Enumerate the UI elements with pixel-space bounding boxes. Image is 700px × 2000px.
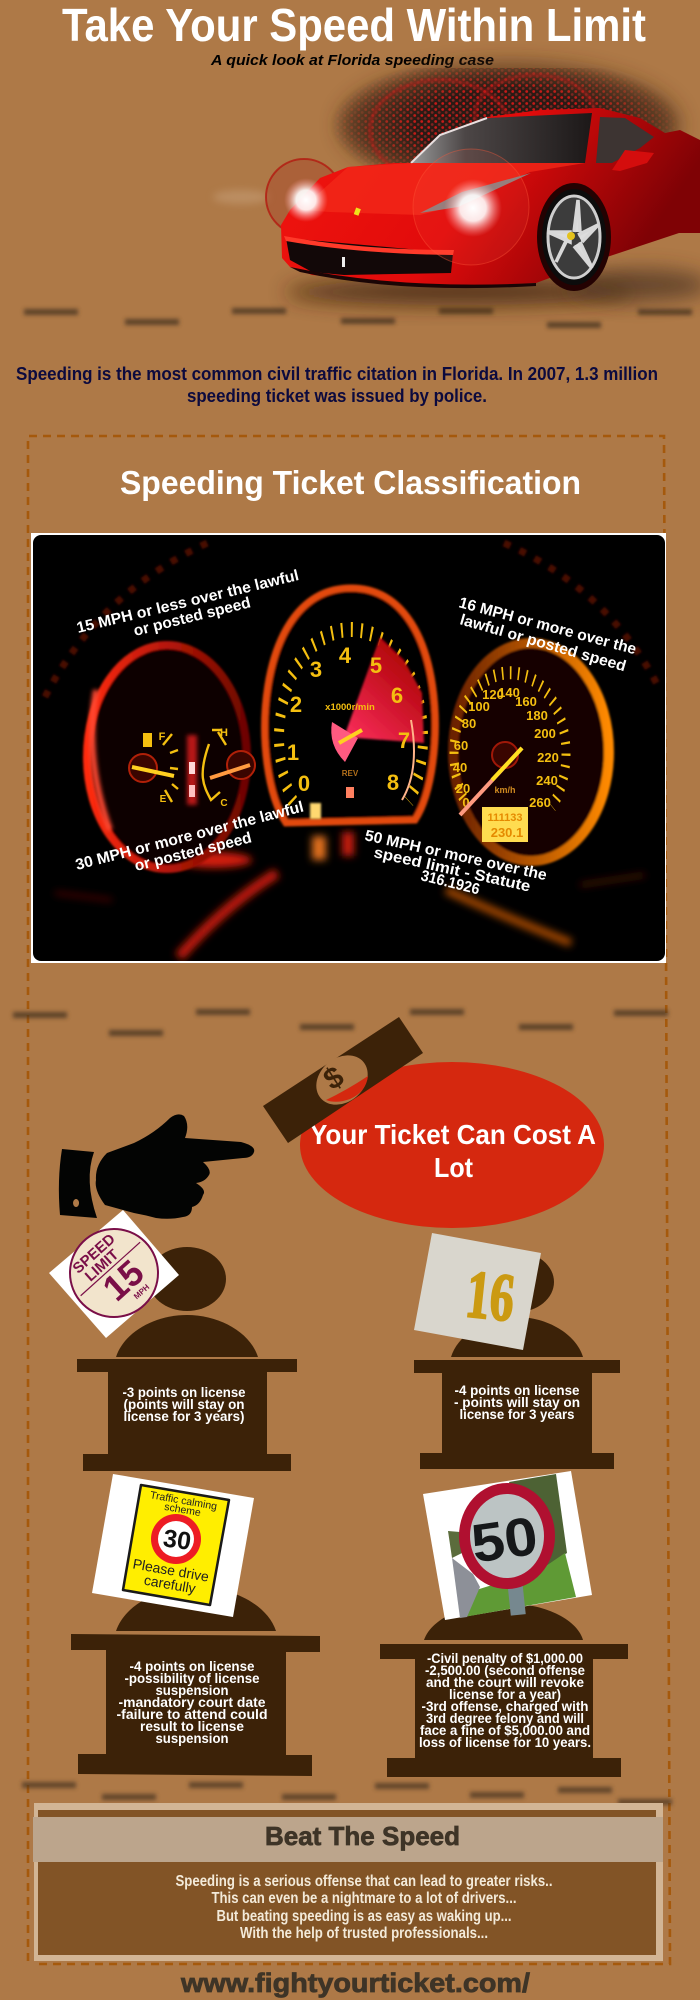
podium 4: 50 mph penalty: and the court will revoke [426,1674,584,1690]
center tachometer [265,588,435,823]
podium 4: 50 mph penalty: -3rd offense, charged with [422,1698,588,1714]
sign: speed limit 15: LIMIT [82,1246,122,1285]
panel: beat the speed: But beating speeding is as easy as waking up... [216,1908,512,1925]
podium 3: 30 mph penalty [71,1587,320,1776]
podium 4: 50 mph penalty [380,1603,628,1777]
panel: beat the speed: With the help of trusted professionals... [240,1925,488,1942]
right speedometer: 220 [537,750,559,765]
left fuel and temperature gauge: E [160,794,167,805]
right speedometer: 20 [456,781,470,796]
sign: traffic calming 30: Please drive [132,1556,210,1585]
dashboard photo panel [31,533,666,963]
sign: speed limit 15 [49,1210,179,1338]
section heading: Speeding Ticket Classification [120,464,581,501]
road dashes bottom [22,1782,672,1805]
podium 4: 50 mph penalty: face a fine of $5,000.00 and [420,1722,590,1738]
left fuel and temperature gauge: F [159,731,166,743]
sign: number 16 card [414,1233,541,1350]
podium 1: 15 mph penalty [77,1247,297,1471]
subtitle: A quick look at Florida speeding case [210,52,494,69]
right speedometer: 240 [536,773,558,788]
left fuel and temperature gauge: H [220,727,228,739]
icon: dollar bill: $ [318,1060,350,1097]
right speedometer: km/h [494,785,516,795]
podium 4: 50 mph penalty: -2,500.00 (second offense [425,1662,585,1678]
right speedometer: 100 [468,699,490,714]
sign: speed limit 15: SPEED [70,1230,119,1277]
right speedometer: 111133 [488,812,522,824]
podium 4: 50 mph penalty: loss of license for 10 years. [419,1734,591,1750]
label: 50 mph: speed limit - Statute [372,844,532,896]
cost callout ellipse [300,1062,604,1228]
right speedometer: 140 [498,685,520,700]
right speedometer: 160 [515,694,537,709]
podium 2: 16 mph penalty: license for 3 years [460,1406,575,1422]
label: 15 mph: or posted speed [132,594,252,640]
podium 3: 30 mph penalty: -mandatory court date [118,1694,266,1710]
panel: beat the speed: This can even be a nightmare to a lot of drivers... [212,1890,516,1907]
podium 2: 16 mph penalty [414,1252,620,1469]
right speedometer: 60 [454,738,468,753]
right speedometer: 260 [529,795,551,810]
center tachometer: 4 [339,643,352,668]
podium 3: 30 mph penalty: suspension [156,1730,228,1746]
center tachometer: 1 [287,740,299,765]
right speedometer: 230.1 [491,825,523,840]
center tachometer: 6 [391,683,403,708]
right speedometer: 120 [482,687,504,702]
sign: speed limit 15: MPH [132,1282,151,1301]
sign: speed limit 50 photo [423,1471,592,1620]
left fuel and temperature gauge: C [220,798,228,809]
sign: traffic calming 30 [92,1474,254,1617]
label: 30 mph: or posted speed [133,829,253,875]
podium 1: 15 mph penalty: (points will stay on [124,1396,244,1412]
lower reflections [55,832,645,957]
podium 4: 50 mph penalty: -Civil penalty of $1,000.00 [427,1650,583,1666]
center tachometer: x1000r/min [325,702,375,713]
center tachometer: 3 [310,657,322,682]
intro paragraph [16,364,658,406]
center tachometer: 5 [370,653,382,678]
label: 50 mph: 316.1926 [419,867,482,898]
background dotted arcs [45,540,660,697]
right speedometer: 80 [462,716,476,731]
podium 3: 30 mph penalty: -failure to attend could [116,1706,268,1722]
podium 3: 30 mph penalty: suspension [156,1682,228,1698]
title: Take Your Speed Within Limit [62,0,646,51]
icon: dollar bill [263,1017,423,1143]
panel: beat the speed [33,1803,663,1961]
center tachometer: 7 [398,728,410,753]
left fuel and temperature gauge [87,645,255,869]
intro paragraph: speeding ticket was issued by police. [187,386,487,406]
icon: pointing hand [59,1114,254,1219]
right speedometer: 200 [534,726,556,741]
podium 4: 50 mph penalty: license for a year) [449,1686,561,1702]
center tachometer: 2 [290,692,302,717]
center tachometer: 8 [387,770,399,795]
cost callout ellipse: Lot [434,1152,473,1183]
podium 3: 30 mph penalty: -4 points on license [130,1658,255,1674]
hero illustration: red sports car [213,63,700,305]
center tachometer: REV [342,769,359,778]
podium 2: 16 mph penalty: - points will stay on [454,1394,580,1410]
right speedometer: 180 [526,708,548,723]
dashed section frame [28,436,670,1964]
road dashes middle [13,1009,668,1036]
panel: beat the speed: Beat The Speed [265,1821,460,1851]
footer url: www.fightyourticket.com/ [180,1968,531,1998]
road dashes top [24,308,692,328]
sign: traffic calming 30: 30 [161,1524,193,1556]
label: 16 mph: 16 MPH or more over the [457,594,638,658]
podium 2: 16 mph penalty: -4 points on license [454,1382,580,1398]
right speedometer [453,643,609,861]
sign: speed limit 15: 15 [95,1252,152,1309]
center tachometer: 0 [298,771,310,796]
label: 16 mph: lawful or posted speed [458,612,628,675]
podium 1: 15 mph penalty: license for 3 years) [124,1408,244,1424]
panel: beat the speed: Speeding is a serious offense that can lead to greater risks.. [176,1873,552,1890]
sign: number 16 card: 16 [462,1255,518,1336]
sign: speed limit 50 photo: 50 [468,1506,541,1574]
podium 3: 30 mph penalty: -possibility of license [124,1670,260,1686]
right speedometer: 0 [462,795,470,810]
sign: traffic calming 30: scheme [163,1501,202,1519]
label: 30 mph: 30 MPH or more over the lawful [74,799,306,874]
cost callout ellipse: Your Ticket Can Cost A [310,1119,596,1150]
sign: traffic calming 30: Traffic calming [149,1489,218,1513]
podium 4: 50 mph penalty: 3rd degree felony and will [426,1710,584,1726]
podium 3: 30 mph penalty: result to license [140,1718,244,1734]
label: 15 mph: 15 MPH or less over the lawful [75,567,301,637]
sign: traffic calming 30: carefully [143,1572,197,1596]
label: 50 mph: 50 MPH or more over the [363,827,549,884]
right speedometer: 40 [453,760,467,775]
podium 1: 15 mph penalty: -3 points on license [122,1384,246,1400]
intro paragraph: Speeding is the most common civil traffic citation in Florida. In 2007, 1.3 million [16,364,658,384]
